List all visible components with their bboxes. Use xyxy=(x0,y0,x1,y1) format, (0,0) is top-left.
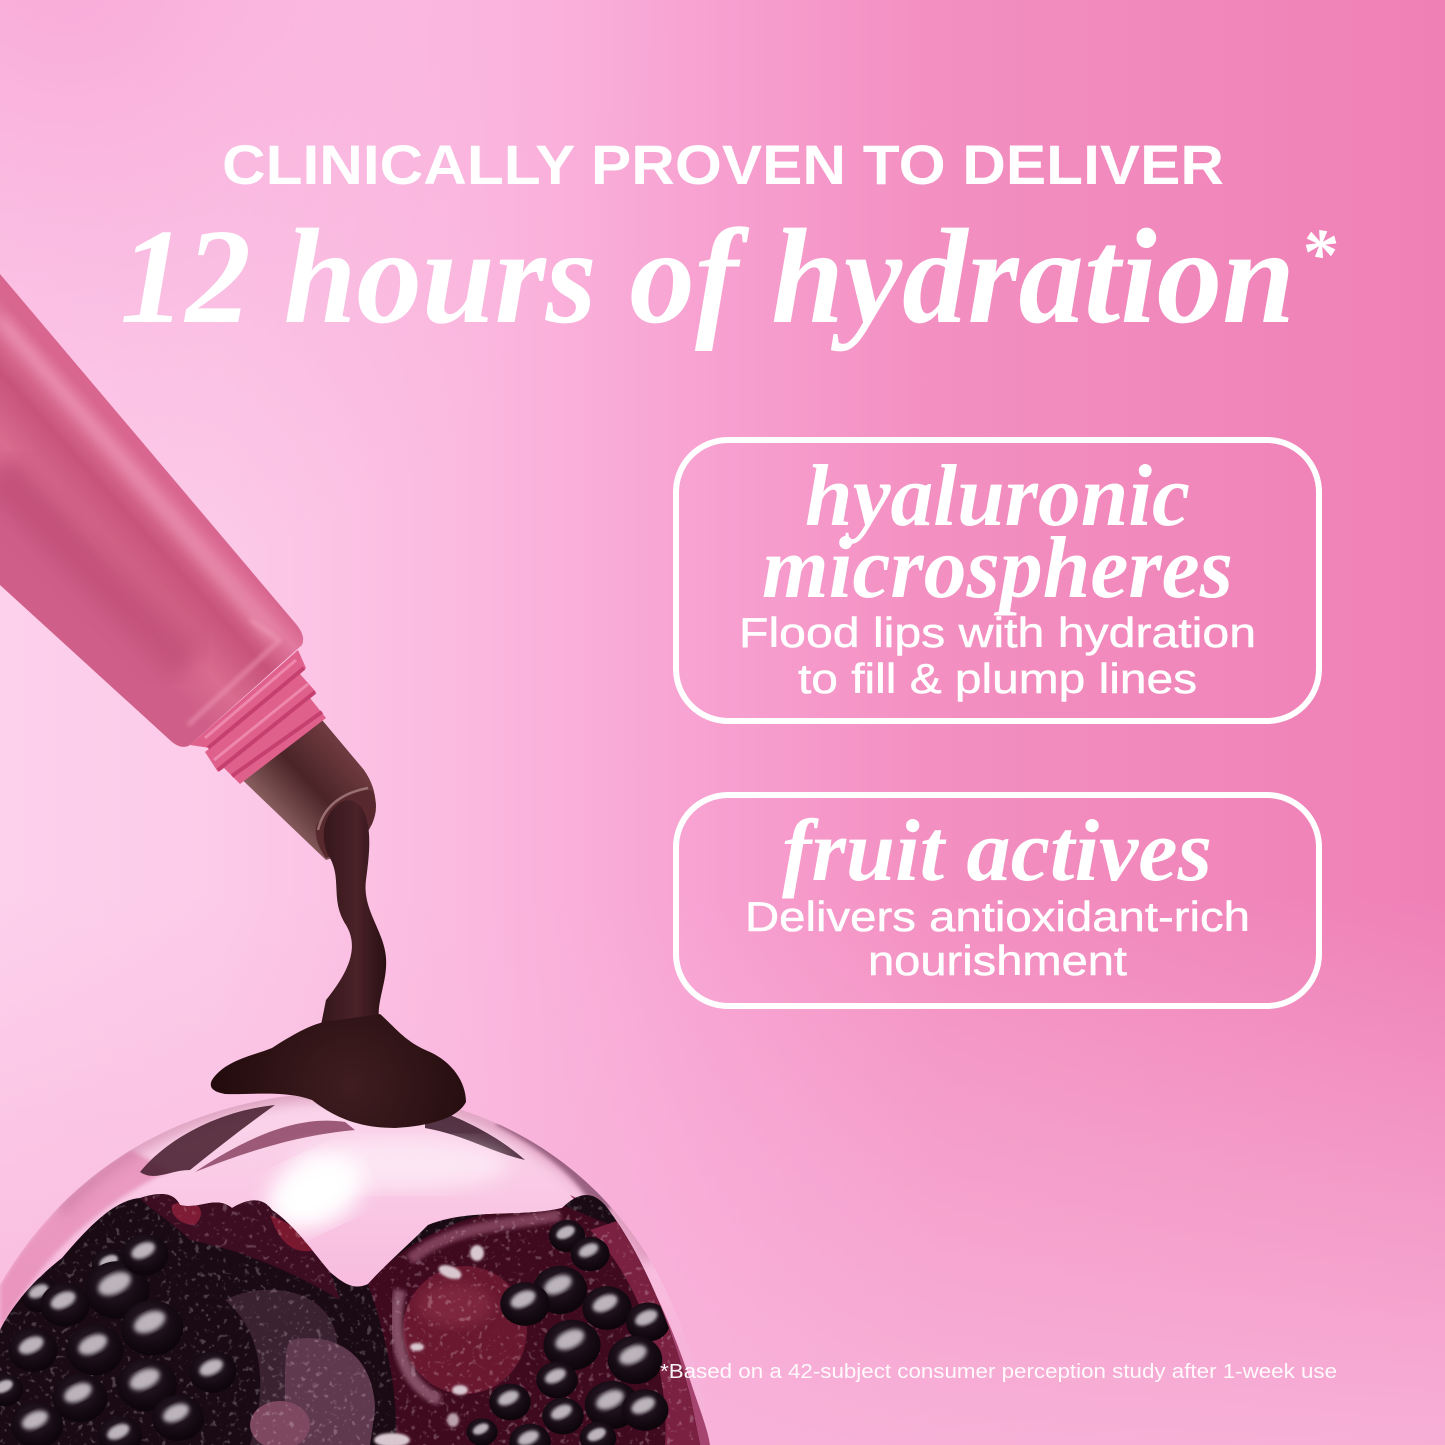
heading: clinically proven: CLINICALLY PROVEN TO DELIVER xyxy=(222,133,1224,196)
product blob on sphere xyxy=(211,1014,466,1128)
panel: hyaluronic microspheres xyxy=(676,440,1319,721)
panel heading: microspheres: microspheres xyxy=(762,520,1233,617)
berries right cluster xyxy=(549,1220,585,1252)
product strand flowing xyxy=(320,800,386,1030)
title: 12 hours of hydration: * xyxy=(1300,214,1337,294)
right cluster outer ring xyxy=(590,1220,700,1445)
panel heading: fruit actives: fruit actives xyxy=(782,803,1212,900)
left top red area xyxy=(140,1192,340,1300)
footnote: *Based on a 42-subject consumer perception study after 1-week use xyxy=(660,1361,1337,1383)
dark reflections under blob xyxy=(140,1105,275,1176)
title: 12 hours of hydration: 12 hours of hydration xyxy=(120,202,1295,352)
panel body: nourishment: nourishment xyxy=(868,937,1127,984)
tube nozzle xyxy=(232,708,376,860)
foam specks xyxy=(0,1180,720,1445)
sphere left pink rim band xyxy=(0,1150,170,1330)
tube threaded neck xyxy=(190,650,326,784)
berry mass xyxy=(0,1180,720,1445)
sphere upper rim shading xyxy=(60,1092,650,1260)
panel body: fill and plump: to fill & plump lines xyxy=(798,655,1197,702)
panel body: antioxidant: Delivers antioxidant-rich xyxy=(745,893,1250,940)
tube body xyxy=(0,274,303,747)
glass sphere with berries xyxy=(0,1092,720,1445)
berries left cluster xyxy=(92,1249,122,1267)
panel heading: hyaluronic: hyaluronic xyxy=(805,448,1190,545)
center silver area xyxy=(225,1290,338,1445)
right cluster dark red flesh xyxy=(368,1205,720,1445)
product tube xyxy=(0,274,376,860)
large red fruit lobe xyxy=(403,1266,527,1394)
foam around right lobe xyxy=(396,1290,440,1400)
small pale drupelets on the red lobe xyxy=(374,1245,484,1445)
panel: fruit actives xyxy=(676,795,1319,1006)
panel body: flood lips: Flood lips with hydration xyxy=(739,609,1256,656)
sphere bright highlight xyxy=(290,1139,510,1191)
right burgundy rim xyxy=(570,1195,710,1445)
